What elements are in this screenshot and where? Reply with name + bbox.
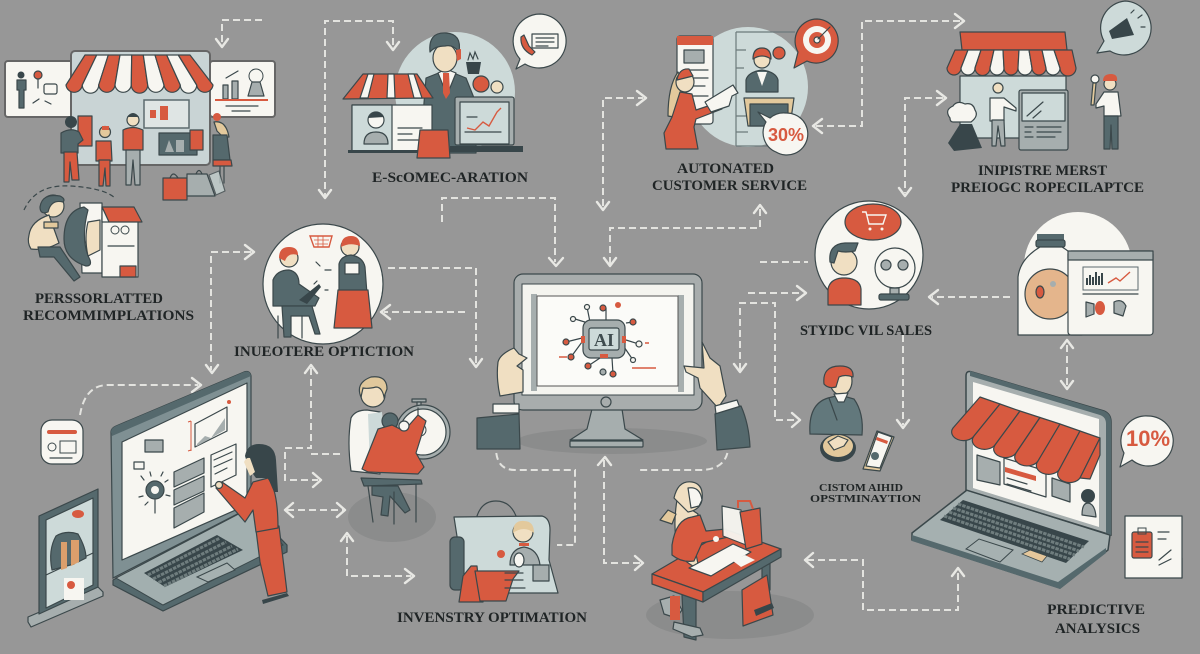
panel: inventory poster: [450, 501, 558, 602]
AI chip with nodes: AI: [594, 330, 614, 350]
shopping bags on desk: [722, 501, 762, 549]
label: predictive analysis: ANALYSICS: [1055, 621, 1140, 637]
desk monitor: [744, 98, 794, 126]
salesman: [420, 33, 476, 153]
open notebook: [689, 544, 751, 576]
30 percent bubble: 30%: [768, 125, 804, 145]
screen bulb sketch: [134, 440, 170, 513]
white circle: [263, 224, 383, 344]
carry handle: [477, 501, 516, 516]
label: personalized recommendations: RECOMMIMPLATIONS: [23, 308, 194, 324]
arrow: sales to customer down: [897, 335, 909, 428]
keyboard: [940, 500, 1089, 563]
window display: [144, 100, 197, 155]
target speech bubble: [794, 19, 838, 68]
striped awning: [66, 55, 213, 93]
dark tube: [450, 537, 464, 590]
store frame: [71, 51, 210, 165]
woman with paper: [664, 69, 738, 149]
label: personalized recommendations: [23, 291, 194, 324]
right hand and sleeve: [684, 342, 750, 450]
label: dynamic sales: STYIDC VIL SALES: [800, 323, 932, 339]
mini awning: [343, 74, 433, 99]
label: predictive analysis: PREDICTIVE: [1047, 602, 1145, 618]
arrow: bottle to sales: [929, 290, 1010, 304]
left side panel: [5, 61, 73, 117]
arrow: into central monitor from above: [442, 198, 563, 266]
desk top: [652, 530, 781, 602]
base edge: [912, 535, 1106, 589]
keyboard: [144, 535, 243, 587]
chart laptop: [450, 97, 523, 152]
phone document: [677, 36, 713, 124]
arrow: laptop stylist double: [285, 503, 345, 517]
screen cards: [174, 444, 236, 528]
laptop awning: [952, 397, 1100, 483]
panel: right laptop predictive analytics: [912, 371, 1182, 589]
seated woman: [660, 482, 728, 569]
bottle: [1018, 234, 1082, 335]
shopper four: [190, 113, 232, 183]
presenter woman: [990, 83, 1016, 146]
screen: [522, 284, 694, 395]
laptop base: [912, 490, 1110, 588]
arrow: monitor to desk: [598, 420, 728, 570]
document: [1125, 516, 1182, 578]
arrow: laptop to desk: [805, 553, 964, 610]
boy: [828, 243, 861, 305]
trackpad: [966, 539, 1013, 562]
arrow: top left into store: [216, 20, 262, 47]
label: store heading: INIPISTRE MERST: [978, 163, 1107, 179]
10 percent bubble: [1120, 416, 1173, 467]
small card: [41, 420, 83, 464]
label: predictive analysis: [1047, 602, 1145, 637]
clothing stand: [28, 489, 103, 627]
label: inventory optimization: INVENSTRY OPTIMATION: [397, 610, 587, 626]
panel: storefront with shoppers: [5, 51, 275, 200]
ground shadow: [646, 591, 814, 639]
arrow: customer service split: [597, 91, 646, 210]
10 percent bubble: 10%: [1126, 426, 1170, 451]
ground shadow: [348, 492, 436, 542]
seated client: [361, 413, 426, 524]
arrow: left to inventory optimisation and laptop: [206, 245, 254, 373]
panel: inventory store with presenter: [947, 1, 1151, 151]
standing woman with basket: [310, 236, 372, 328]
ground shadow: [517, 428, 707, 454]
panel: stylist and clock: [348, 377, 450, 542]
laptop screen: [111, 372, 251, 578]
desk legs: [673, 560, 770, 640]
label: customer optimisation: [810, 482, 921, 505]
pale backdrop circle: [688, 27, 808, 147]
label: personalized recommendations: PERSSORLATTED: [35, 291, 163, 307]
head bulb: [875, 248, 915, 300]
left hand and sleeve: [477, 348, 527, 449]
power button: [601, 397, 611, 407]
shopfront: [960, 76, 1066, 138]
panel: personalised recommendations illustration: [24, 186, 142, 281]
arrow: optimisation to stylist: [285, 365, 340, 487]
price tag: [1022, 550, 1047, 562]
legs and stool: [660, 596, 682, 620]
arrow: stylist to inventory: [341, 533, 414, 583]
label: customer optimisation: OPSTMINAYTION: [810, 493, 921, 505]
bowl: [820, 434, 856, 462]
analytics window: [1068, 251, 1153, 335]
label: e-commerce: E-ScOMEC-ARATION: [372, 170, 528, 186]
note card: [733, 555, 755, 567]
monitor stand: [570, 409, 643, 447]
cloud and bag: [948, 102, 982, 151]
globe and paper: [64, 203, 102, 273]
right side panel: [210, 61, 275, 117]
plant pot: [466, 52, 503, 93]
red bags: [417, 130, 450, 158]
screen chart: [188, 400, 231, 451]
panel: woman at red desk: [646, 482, 814, 640]
phone speech bubble: [513, 14, 566, 69]
label: automated customer service: AUTONATED: [677, 161, 774, 177]
monitor frame: [514, 274, 702, 410]
kiosk screen: [1019, 90, 1068, 150]
label: store heading: PREIOGC ROPECILAPTCE: [951, 180, 1144, 196]
arrow: optimisation to monitor: [388, 268, 482, 367]
panel: customer with bowl: [810, 366, 894, 471]
trackpad: [197, 563, 235, 582]
AI chip with nodes: [559, 302, 656, 377]
awning: [947, 32, 1076, 76]
arrow: monitor to sales circle: [748, 262, 808, 300]
panel: e-commerce integration: [343, 14, 566, 158]
label: store heading: [951, 163, 1144, 196]
mini recommendation kiosk: [102, 207, 142, 277]
agent: [746, 47, 785, 92]
label: automated customer service: [652, 161, 807, 194]
pale backdrop circle: [395, 32, 515, 152]
arrow: card to laptop: [80, 378, 201, 415]
reading person: [28, 195, 80, 281]
shopper two: [96, 126, 112, 186]
dashed thought arc: [24, 186, 115, 210]
laptop screen: [966, 371, 1111, 535]
label: inventory optimisation: INUEOTERE OPTICTION: [234, 344, 414, 360]
30 percent bubble: [758, 112, 808, 155]
arrow: monitor up to automated customer service: [604, 205, 766, 266]
mini store: [348, 105, 444, 153]
arrow: bottle to laptop double: [1061, 340, 1073, 389]
label: automated customer service: CUSTOMER SERVICE: [652, 178, 807, 194]
panel: automated customer service: [664, 19, 838, 155]
arrow: store to dynamic sales: [899, 91, 946, 196]
white arch: [1024, 212, 1132, 320]
arrow: down to inventory optimisation and across to e-commerce: [319, 21, 399, 198]
poster sheet: [454, 516, 558, 593]
red cart bubble: [845, 204, 901, 240]
arrow: monitor to sales and customer: [734, 303, 800, 427]
clock: [396, 399, 450, 459]
woman at screen: [216, 444, 289, 604]
arrow: store to customer service: [813, 14, 964, 133]
shopping bags: [163, 170, 225, 200]
panel: bottle analytics: [1018, 212, 1153, 335]
man with magnifier: [1091, 74, 1121, 149]
portrait: [497, 521, 540, 567]
white circle: [815, 201, 923, 309]
scale line: [736, 32, 795, 146]
panel: central AI monitor: [477, 274, 750, 454]
panel: dynamic sales: [815, 201, 923, 309]
arrow: monitor to inventory: [496, 420, 575, 545]
seated person with laptop: [273, 247, 321, 338]
phone card: [863, 431, 894, 471]
counter: [78, 116, 92, 146]
arrow: monitor to optimisation: [381, 305, 465, 319]
screen cards: [977, 455, 1096, 517]
box and bag: [459, 565, 549, 602]
red bag and shoe under desk: [742, 575, 774, 626]
scribble notes: [314, 262, 331, 290]
standing man: [349, 377, 387, 474]
shopper one: [61, 116, 83, 182]
panel: inventory optimisation circle: [263, 224, 383, 344]
megaphone bubble: [1097, 1, 1151, 55]
label: customer optimisation: CISTOM AIHID: [819, 482, 903, 494]
customer figure: [810, 366, 862, 435]
laptop base: [113, 507, 287, 611]
panel: large laptop with woman: [28, 372, 289, 627]
shopper three: [123, 113, 143, 185]
